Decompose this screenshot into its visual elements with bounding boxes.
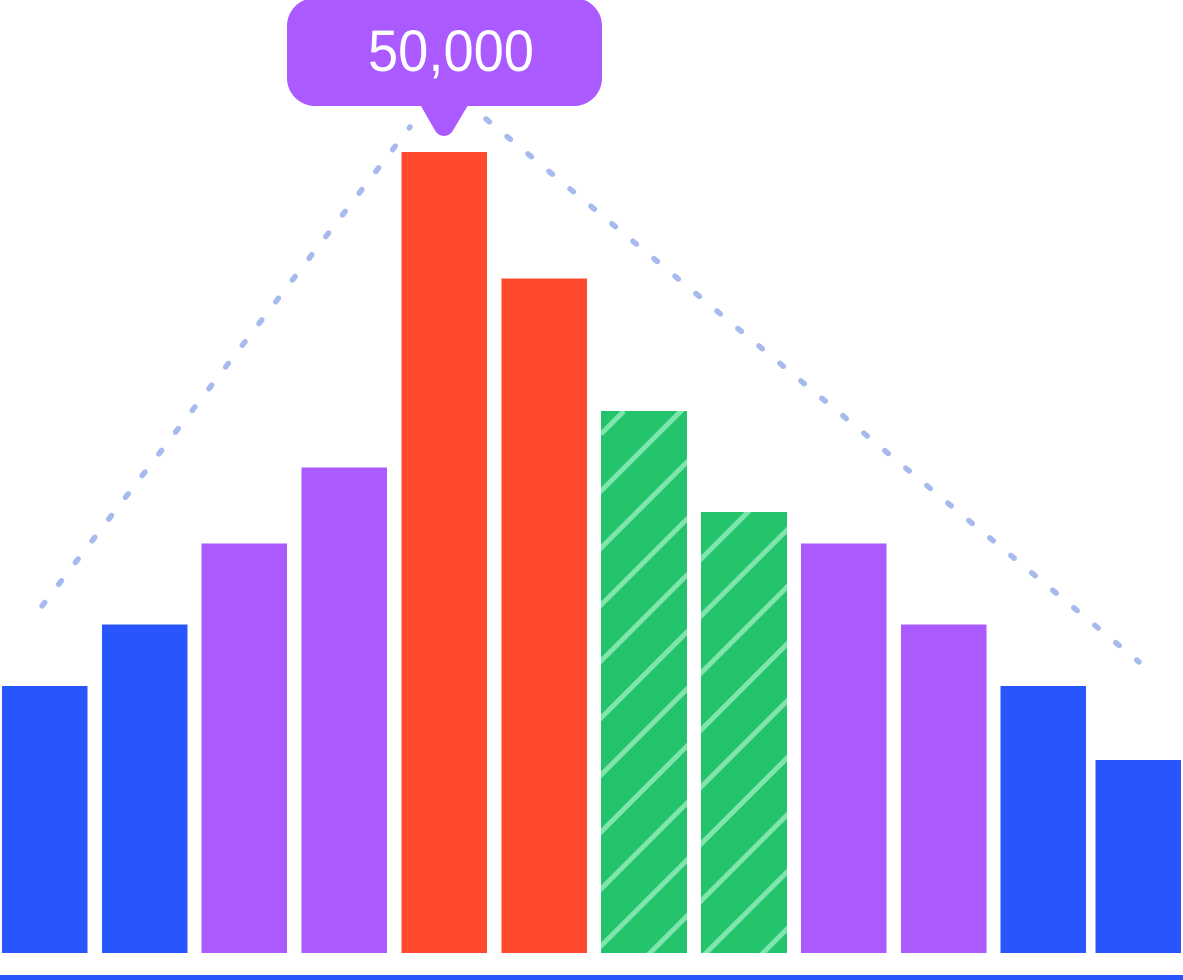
callout: peak value: 50,000	[368, 19, 534, 84]
green striped bar: first	[601, 411, 687, 953]
baseline	[0, 975, 1183, 980]
callout: peak value	[287, 0, 602, 136]
dotted trend line: right	[486, 119, 1139, 662]
red bars: peak	[402, 152, 587, 953]
dotted trend line: left	[42, 127, 410, 606]
blue bars: left	[2, 624, 188, 953]
blue bars: right	[1000, 686, 1181, 953]
green striped bar: second	[701, 512, 787, 953]
purple bars: right	[801, 544, 986, 953]
purple bars: left	[202, 468, 387, 953]
